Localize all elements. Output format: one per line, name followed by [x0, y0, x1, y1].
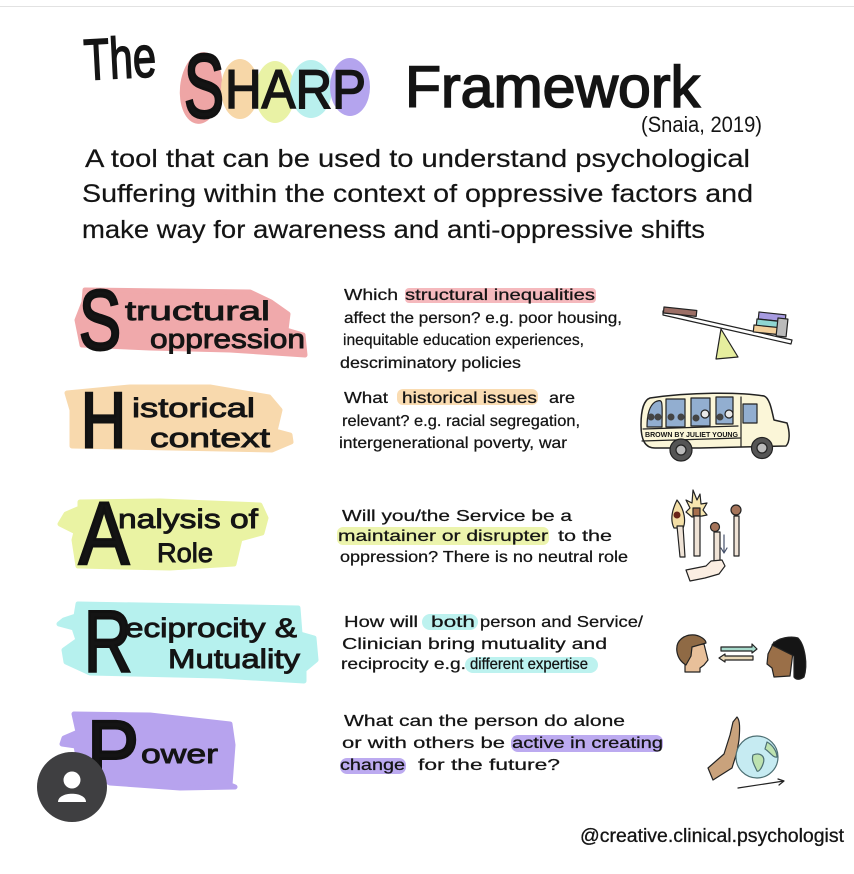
exchange arrows [721, 644, 757, 653]
text block: power question: or with others be [342, 735, 505, 752]
heading: Analysis of Role: nalysis of [118, 504, 259, 534]
text block: power question: What can the person do alone [344, 713, 625, 730]
text block: reciprocity question [341, 614, 644, 673]
subtitle text: A tool that can be used to understand psychological [85, 145, 750, 173]
heading: Historical context: istorical [132, 393, 255, 423]
subtitle text: make way for awareness and anti-oppressive shifts [82, 216, 705, 244]
heading: Historical context: H [81, 376, 126, 464]
heading: Analysis of Role: A [79, 484, 129, 583]
subtitle text: Suffering within the context of oppressive factors and [82, 180, 753, 208]
text block: structural question [340, 287, 622, 372]
citation: (Snaia, 2019) [641, 112, 762, 137]
panel: power label [62, 702, 235, 801]
text block: role question [337, 508, 628, 566]
text block: historical question: historical issues [402, 390, 537, 407]
man [680, 644, 708, 672]
subtitle text [82, 145, 753, 244]
heading: Structural oppression [79, 273, 305, 367]
text block: structural question: affect the person? e.g. poor housing, [344, 310, 622, 327]
panel: reciprocity and mutuality label [59, 594, 316, 690]
text block: structural question: inequitable education experiences, [343, 332, 584, 349]
heading: Analysis of Role [79, 484, 259, 583]
heading: Structural oppression: tructural [125, 296, 270, 326]
text block: role question: Will you/the Service be a [342, 508, 572, 525]
heading: Power: ower [141, 739, 218, 769]
heading: Structural oppression: oppression [150, 324, 305, 354]
text block: historical question: intergenerational poverty, war [339, 435, 568, 452]
text block: role question: oppression? There is no neutral role [340, 549, 628, 566]
text block: reciprocity question: person and Service/ [480, 614, 644, 631]
icon: bus: BROWN BY JULIET YOUNG [645, 432, 739, 439]
title word: The: The [82, 24, 158, 93]
icon: unbalanced seesaw with books [663, 307, 792, 359]
text block: power question: for the future? [418, 757, 560, 774]
icon: two people exchanging [677, 635, 806, 679]
text block: power question [340, 713, 663, 774]
panel: structural oppression label [77, 273, 305, 367]
text block: reciprocity question: reciprocity e.g. [341, 656, 466, 673]
heading: Reciprocity and Mutuality: R [84, 594, 132, 690]
text block: reciprocity question: How will [344, 614, 418, 631]
heading: Reciprocity and Mutuality: eciprocity & [125, 613, 297, 643]
woman [767, 642, 794, 677]
SHARP colour blobs [176, 50, 370, 126]
title word: SHARP: HARP [225, 58, 366, 120]
panel: historical context label [67, 376, 291, 464]
text block: power question: change [340, 757, 405, 774]
text block: structural question: descriminatory policies [340, 355, 521, 372]
text block: historical question: relevant? e.g. racial segregation, [342, 413, 580, 430]
text block: historical question: are [549, 390, 575, 407]
heading: Power: P [87, 702, 139, 801]
text block: structural question: structural inequalities [405, 287, 595, 304]
purple brush stroke [62, 714, 235, 788]
heading: Analysis of Role: Role [157, 538, 213, 568]
heading: Historical context [81, 376, 271, 464]
text block: reciprocity question: Clinician bring mutuality and [342, 636, 607, 653]
heading: Structural oppression: S [79, 273, 121, 367]
text block: role question: to the [558, 528, 612, 545]
icon: hand holding globe [708, 717, 784, 788]
text block: historical question: What [344, 390, 389, 407]
avatar badge [37, 752, 107, 822]
yellow brush stroke [60, 501, 266, 568]
text block: role question: maintainer or disrupter [338, 528, 549, 545]
heading: Power [87, 702, 218, 801]
text block: power question: active in creating [512, 735, 663, 752]
heading: Reciprocity and Mutuality: Mutuality [168, 644, 301, 674]
text block: structural question: Which [344, 287, 398, 304]
panel: analysis of role label [60, 484, 266, 583]
text block: historical question [339, 389, 580, 452]
title word: SHARP [184, 37, 366, 137]
title word: SHARP: S [184, 37, 224, 137]
heading: Reciprocity and Mutuality [84, 594, 301, 690]
credit handle: @creative.clinical.psychologist [580, 826, 845, 847]
text block: reciprocity question: both [431, 614, 475, 631]
icon: matches and hand [672, 490, 741, 581]
heading: Historical context: context [150, 423, 271, 453]
title word: Framework: Framework [405, 55, 701, 120]
cyan brush stroke [59, 604, 316, 681]
icon: bus [641, 393, 789, 461]
orange brush stroke [67, 387, 291, 450]
text block: reciprocity question: different expertise [470, 656, 588, 673]
title [82, 24, 762, 137]
pink brush stroke [77, 290, 305, 355]
